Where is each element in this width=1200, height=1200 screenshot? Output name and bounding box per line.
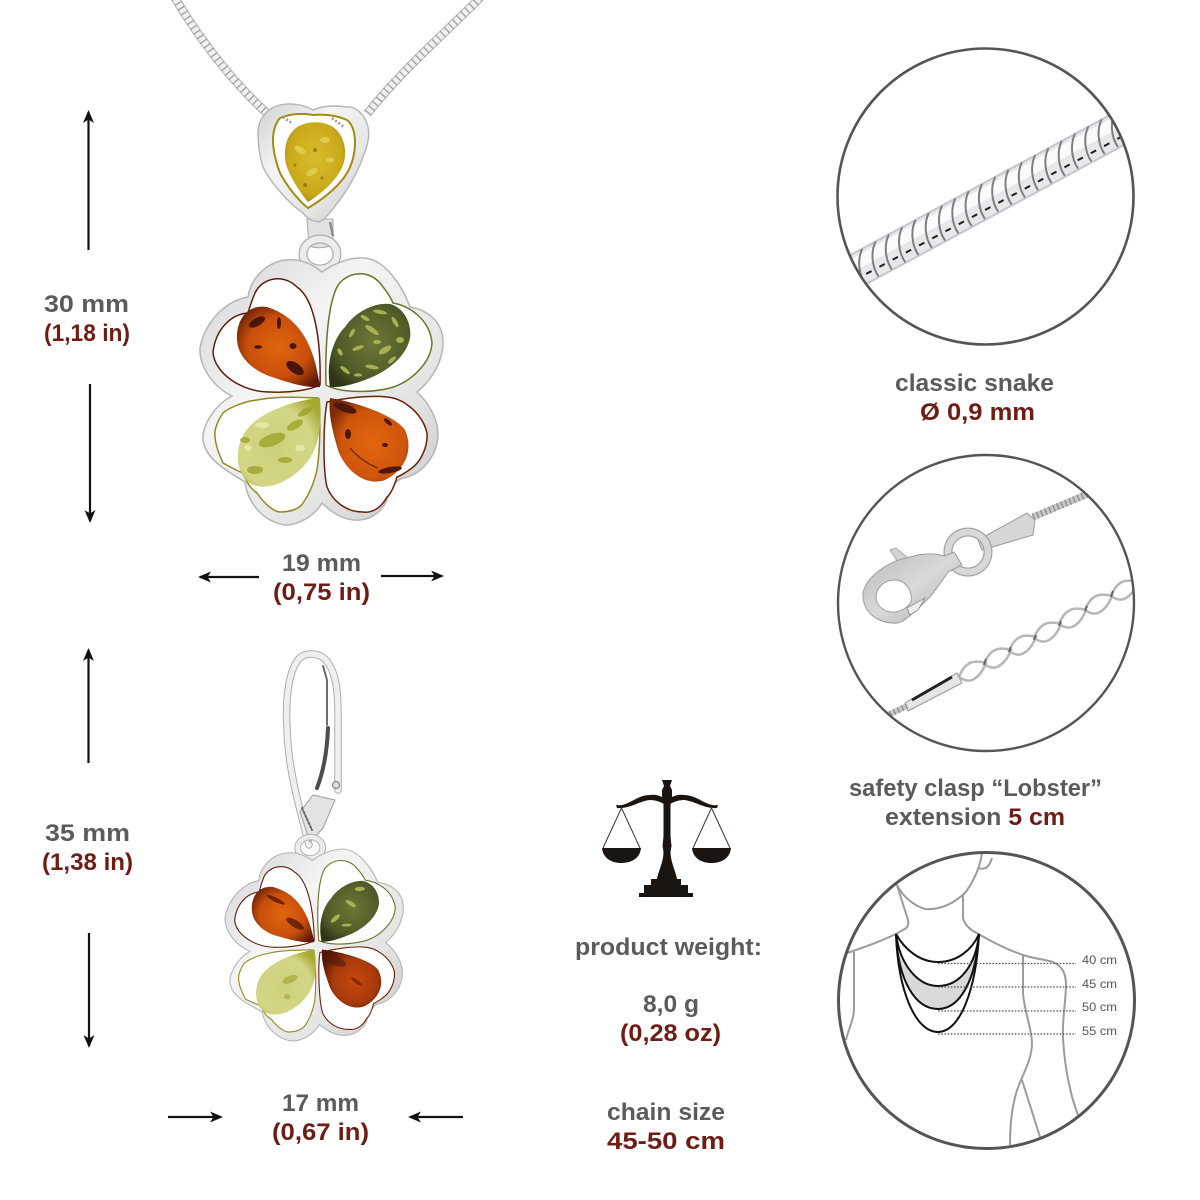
- length labels: [1082, 955, 1117, 1038]
- label: chain size: chain size: [607, 1099, 725, 1126]
- connector: [978, 513, 1035, 550]
- panel: necklace length chart: [838, 852, 1134, 1148]
- snake chain end top: [1033, 493, 1090, 517]
- heart bail with yellow stone: [258, 104, 369, 248]
- arrow: earring width left: [408, 1112, 463, 1122]
- arrow: pendant height down: [84, 384, 96, 523]
- label: safety clasp: [849, 775, 1102, 831]
- label: pendant height: 30 mm: [44, 291, 129, 318]
- necklace chain: [175, 0, 480, 114]
- length labels: 50 cm: [1082, 1002, 1117, 1014]
- earring: [222, 654, 409, 1044]
- panel: snake chain detail: [838, 48, 1134, 344]
- label: weight value: 8,0 g: [643, 991, 699, 1018]
- label: product weight: product weight:: [575, 934, 762, 961]
- arrow: earring width right: [168, 1112, 223, 1122]
- label: earring height: 35 mm: [45, 820, 130, 847]
- clover frame and stones: [200, 239, 443, 525]
- label: pendant width: 19 mm: [282, 550, 361, 577]
- label: earring height: [42, 820, 133, 876]
- icon: weighing scale: [602, 780, 731, 897]
- label: pendant width: [273, 550, 370, 606]
- label: earring width: [272, 1090, 369, 1146]
- label: earring width: 17 mm: [282, 1090, 359, 1117]
- length labels: 40 cm: [1082, 955, 1117, 967]
- lever back hook: [287, 654, 340, 845]
- label: safety clasp: extension 5 cm: [885, 804, 1065, 831]
- body outline: [846, 853, 1078, 1145]
- label: earring height: (1,38 in): [42, 849, 133, 876]
- label: pendant width: (0,75 in): [273, 579, 370, 606]
- label: pendant height: (1,18 in): [44, 320, 130, 347]
- length labels: 45 cm: [1082, 979, 1117, 991]
- label: classic snake: [895, 370, 1054, 426]
- extender: [959, 581, 1138, 681]
- label: weight value: [620, 991, 721, 1047]
- label: classic snake: Ø 0,9 mm: [920, 399, 1035, 426]
- dotted leaders: [938, 964, 1076, 1034]
- label: chain size: 45-50 cm: [607, 1128, 725, 1155]
- label: safety clasp: safety clasp “Lobster”: [849, 775, 1102, 802]
- label: weight value: (0,28 oz): [620, 1020, 721, 1047]
- arrow: pendant width left: [198, 572, 259, 582]
- label: pendant height: [44, 291, 130, 347]
- length labels: 55 cm: [1082, 1026, 1117, 1038]
- label: classic snake: classic snake: [895, 370, 1054, 397]
- arrow: earring height up: [83, 648, 94, 763]
- earring clover: [222, 833, 409, 1044]
- lobster clasp: [890, 548, 908, 562]
- arrow: earring height down: [84, 933, 94, 1048]
- arrow: pendant width right: [381, 570, 444, 582]
- 50 cm highlighted zone: [897, 945, 977, 1009]
- pendant with amber stones: [200, 104, 443, 525]
- arrow: pendant height up: [83, 110, 94, 250]
- label: earring width: (0,67 in): [272, 1119, 369, 1146]
- jump ring: [948, 532, 988, 572]
- necklaces: [896, 934, 979, 1032]
- panel: clasp detail: [838, 455, 1138, 751]
- label: chain size: [607, 1099, 725, 1155]
